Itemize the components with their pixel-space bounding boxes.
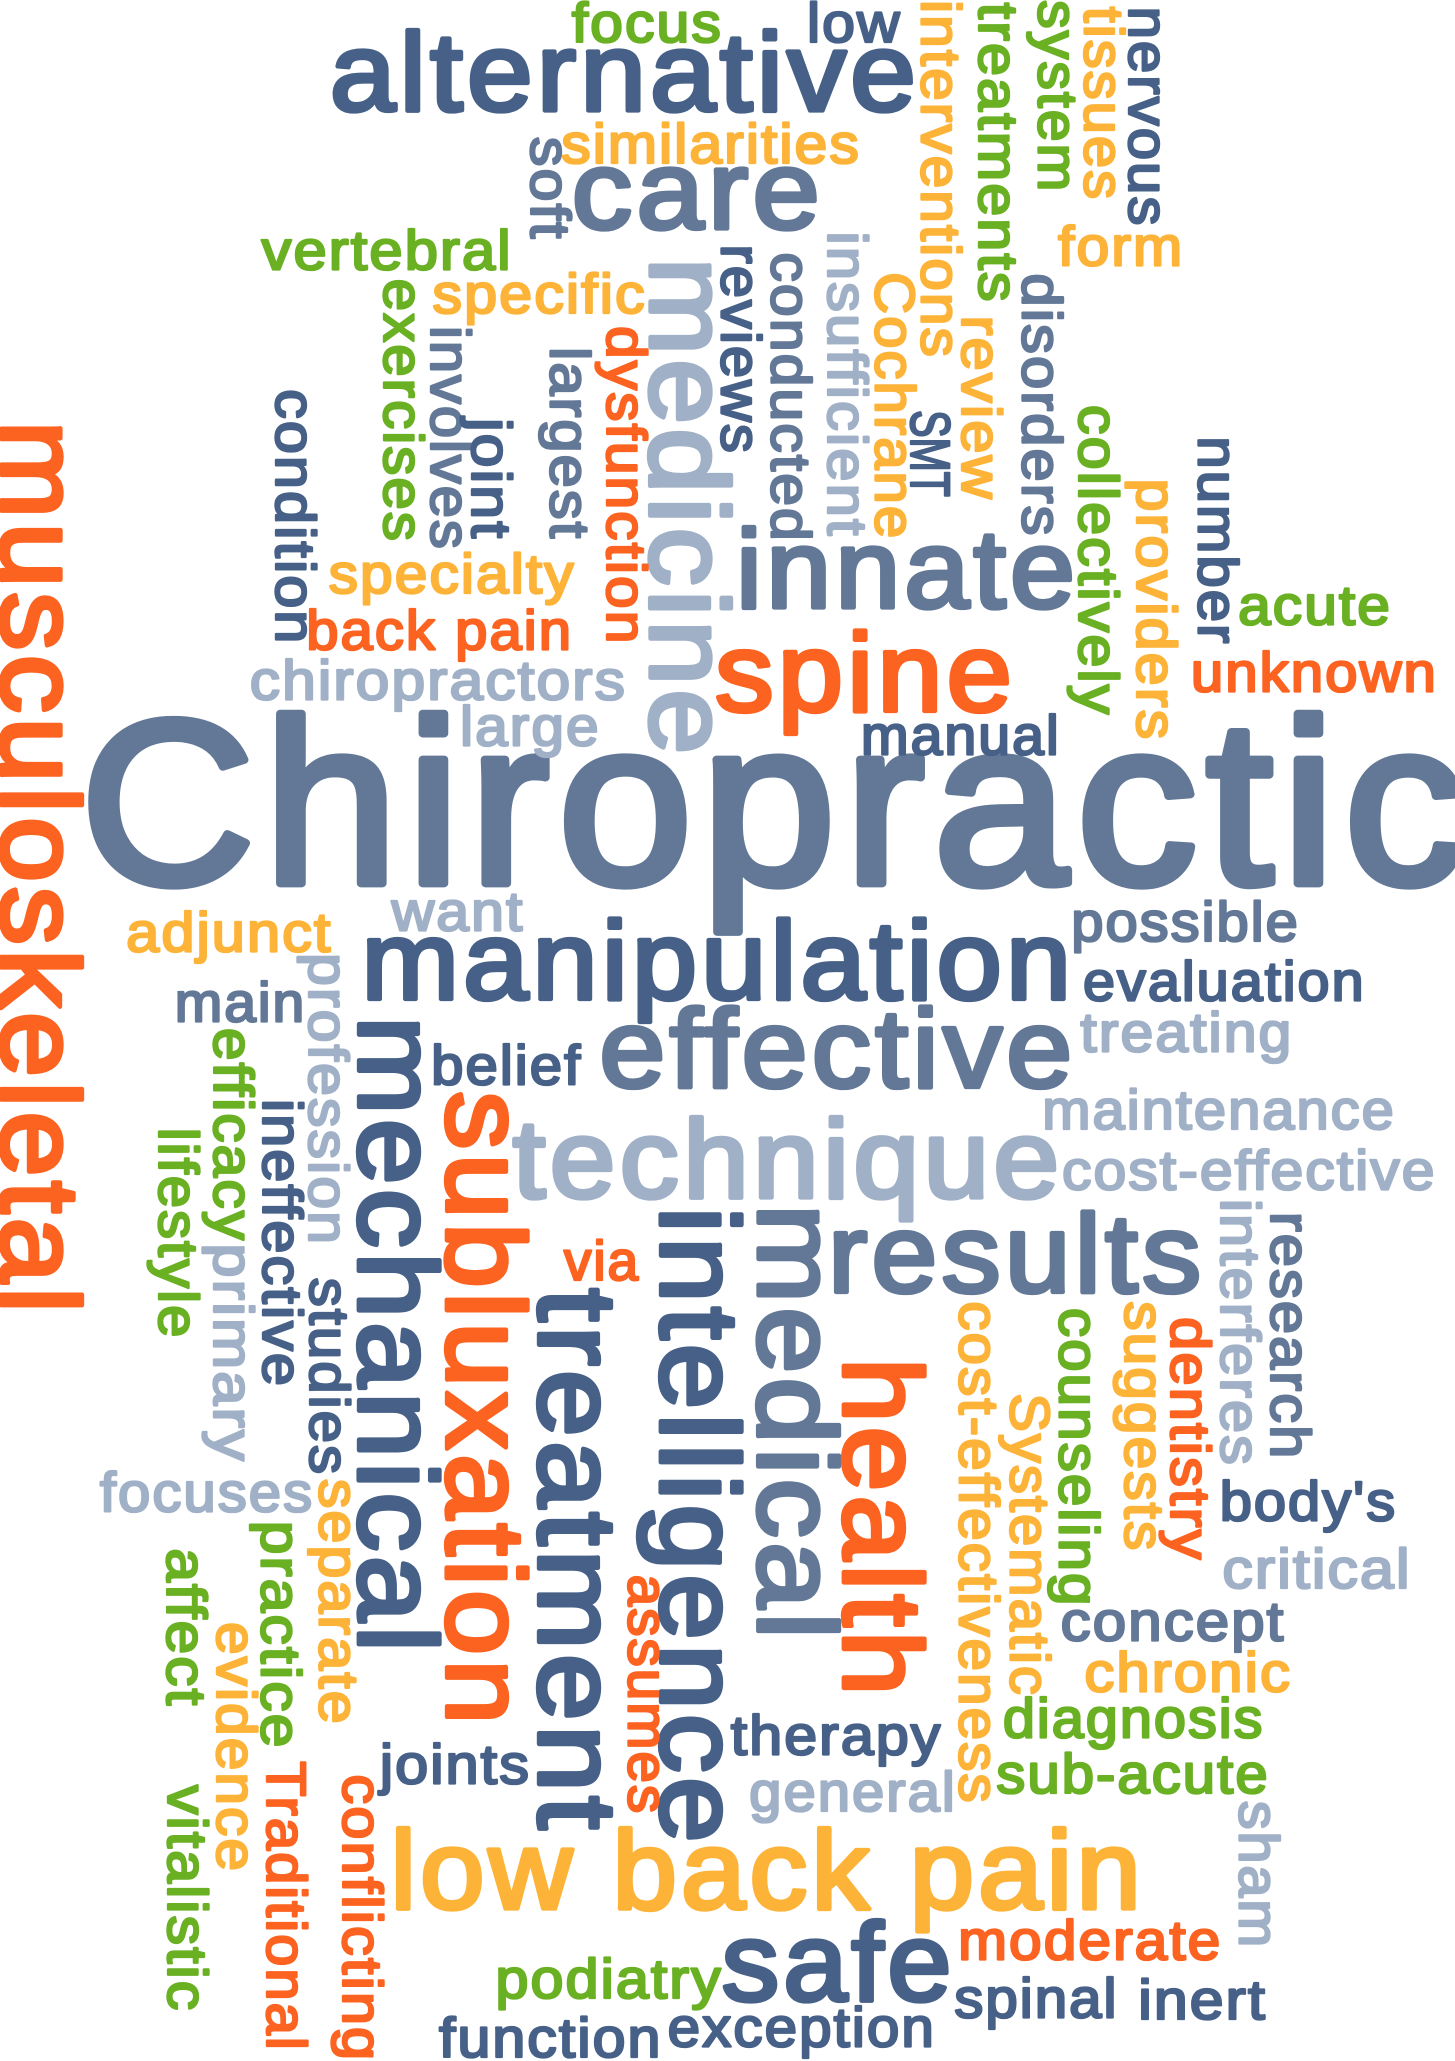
- word: soft: soft: [519, 137, 581, 241]
- word: unknown: unknown: [1191, 641, 1438, 703]
- word: interventions: interventions: [909, 0, 971, 359]
- word: interferes: interferes: [1209, 1199, 1271, 1467]
- word: medicine: medicine: [627, 258, 752, 758]
- word: collectively: collectively: [1067, 405, 1129, 716]
- word: assumes: assumes: [616, 1575, 678, 1815]
- word: belief: belief: [431, 1034, 582, 1096]
- word: dentistry: dentistry: [1159, 1317, 1221, 1562]
- word: sub-acute: sub-acute: [996, 1743, 1270, 1805]
- word: system: system: [1026, 0, 1088, 193]
- word: specialty: specialty: [329, 543, 576, 605]
- word: exercises: exercises: [372, 279, 434, 543]
- word: safe: safe: [722, 1900, 956, 2025]
- word: suggests: suggests: [1113, 1301, 1175, 1552]
- word: evidence: evidence: [205, 1622, 267, 1873]
- word: conflicting: conflicting: [331, 1774, 393, 2061]
- word: inert: inert: [1138, 1969, 1267, 2031]
- word: form: form: [1058, 216, 1184, 278]
- word: adjunct: adjunct: [126, 902, 333, 964]
- word: want: want: [391, 881, 524, 943]
- word: manipulation: manipulation: [361, 898, 1075, 1023]
- word: innate: innate: [736, 506, 1079, 631]
- word: studies: studies: [298, 1278, 360, 1476]
- title word: Chiropractic: Chiropractic: [80, 671, 1455, 933]
- word: Traditional: Traditional: [255, 1761, 317, 2052]
- word: chronic: chronic: [1084, 1642, 1292, 1704]
- word: treatments: treatments: [967, 3, 1029, 304]
- word: spinal: spinal: [954, 1968, 1119, 2030]
- word: joints: joints: [378, 1734, 531, 1796]
- word: vertebral: vertebral: [262, 219, 513, 281]
- word: chiropractors: chiropractors: [250, 649, 627, 711]
- word: lifestyle: lifestyle: [147, 1128, 209, 1339]
- word: ineffective: ineffective: [251, 1099, 313, 1388]
- word: research: research: [1259, 1212, 1321, 1460]
- word: acute: acute: [1238, 574, 1392, 636]
- word: sham: sham: [1227, 1801, 1289, 1949]
- word: low back pain: low back pain: [390, 1807, 1145, 1932]
- word: tissues: tissues: [1072, 7, 1134, 201]
- word: exception: exception: [668, 1997, 936, 2059]
- word: disorders: disorders: [1011, 273, 1073, 538]
- word: largest: largest: [539, 347, 601, 540]
- word: maintenance: maintenance: [1042, 1079, 1396, 1141]
- word: vitalistic: vitalistic: [156, 1785, 218, 2012]
- word: podiatry: podiatry: [496, 1948, 723, 2010]
- word: possible: possible: [1071, 891, 1300, 953]
- word: large: large: [460, 695, 601, 757]
- word: Cochrane: Cochrane: [863, 272, 925, 540]
- word: back pain: back pain: [306, 599, 573, 661]
- word: condition: condition: [264, 389, 326, 645]
- word: treatment: treatment: [515, 1288, 640, 1834]
- word: dysfunction: dysfunction: [595, 326, 657, 645]
- word: spine: spine: [715, 610, 1016, 735]
- word: subluxation: subluxation: [423, 1091, 548, 1728]
- word: providers: providers: [1125, 478, 1187, 741]
- word: SMT: SMT: [899, 410, 961, 497]
- word: diagnosis: diagnosis: [1003, 1688, 1264, 1750]
- word: affect: affect: [155, 1548, 217, 1707]
- word: concept: concept: [1061, 1590, 1285, 1652]
- word: health: health: [820, 1358, 945, 1700]
- word: specific: specific: [432, 263, 647, 325]
- word: insufficient: insufficient: [816, 231, 878, 538]
- word: reviews: reviews: [710, 245, 772, 455]
- word: Systematic: Systematic: [999, 1393, 1061, 1697]
- word: review: review: [950, 315, 1012, 501]
- word: number: number: [1187, 436, 1249, 645]
- word: moderate: moderate: [958, 1910, 1222, 1972]
- word: therapy: therapy: [731, 1705, 942, 1767]
- word: mechanical: mechanical: [335, 1016, 460, 1656]
- word: joint: joint: [460, 416, 522, 540]
- word: conducted: conducted: [760, 252, 822, 543]
- word: general: general: [749, 1761, 957, 1823]
- word: cost-effective: cost-effective: [1062, 1140, 1437, 1202]
- word: care: care: [572, 128, 824, 253]
- word: involves: involves: [419, 326, 481, 551]
- word: manual: manual: [861, 704, 1061, 766]
- word: body's: body's: [1220, 1471, 1397, 1533]
- word: critical: critical: [1222, 1538, 1412, 1600]
- word: counseling: counseling: [1047, 1308, 1109, 1608]
- word: medical: medical: [734, 1204, 859, 1643]
- word: technique: technique: [513, 1096, 1063, 1221]
- word: treating: treating: [1080, 1002, 1293, 1064]
- word: via: via: [564, 1230, 640, 1292]
- word: primary: primary: [202, 1243, 264, 1463]
- word: effective: effective: [599, 986, 1076, 1111]
- word: practice: practice: [250, 1521, 312, 1749]
- word: similarities: similarities: [561, 113, 861, 175]
- word: separate: separate: [307, 1479, 369, 1726]
- word: profession: profession: [297, 953, 359, 1246]
- word: alternative: alternative: [330, 9, 920, 134]
- word: intelligence: intelligence: [637, 1207, 762, 1847]
- word: evaluation: evaluation: [1083, 950, 1366, 1012]
- word: main: main: [175, 971, 306, 1033]
- word: cost-effectiveness: cost-effectiveness: [947, 1301, 1009, 1805]
- word: focuses: focuses: [100, 1462, 314, 1524]
- word: results: results: [828, 1191, 1205, 1316]
- word: nervous: nervous: [1117, 7, 1179, 227]
- word: efficacy: efficacy: [202, 1028, 264, 1242]
